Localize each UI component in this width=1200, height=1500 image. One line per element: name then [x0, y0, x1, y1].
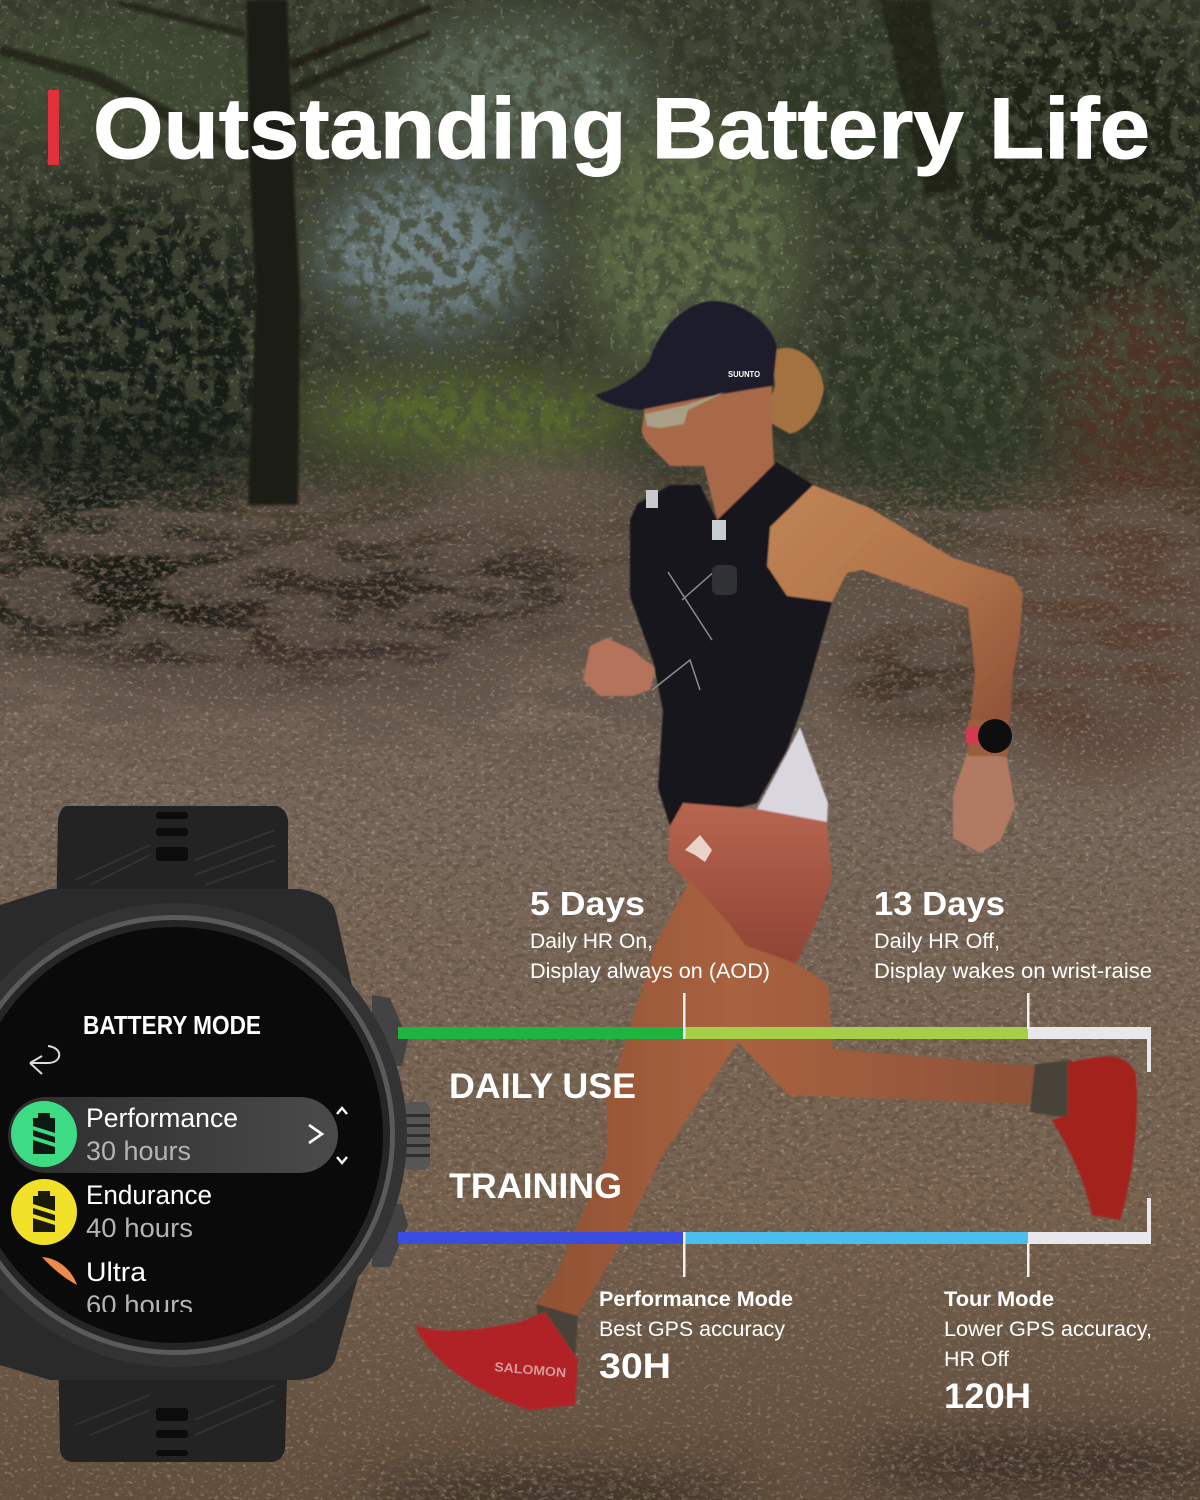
hand	[953, 753, 1015, 853]
screen	[0, 927, 383, 1343]
case lugs	[0, 889, 360, 1380]
watch	[0, 806, 430, 1462]
cap	[595, 301, 777, 410]
training timeline	[398, 1198, 1151, 1277]
title text: Outstanding Battery Life	[93, 81, 1150, 177]
13 days block	[874, 885, 1152, 983]
ultra label: Ultra	[86, 1257, 147, 1287]
runner photo figure	[415, 301, 1137, 1410]
5 days block: Display always on (AOD)	[530, 960, 770, 983]
5 days block: 5 Days	[530, 885, 645, 922]
cap logo: SUUNTO	[728, 369, 760, 379]
performance hours: 30 hours	[86, 1136, 191, 1166]
front fist and forearm	[583, 638, 656, 696]
13 days block: Display wakes on wrist-raise	[874, 960, 1152, 983]
5 days block	[530, 885, 770, 983]
endurance battery icon	[11, 1179, 77, 1245]
cyan segment	[685, 1232, 1028, 1244]
vest bottles and straps	[646, 490, 737, 690]
side buttons	[372, 995, 408, 1267]
training label: TRAINING	[449, 1167, 622, 1206]
head and neck	[642, 380, 774, 522]
performance mode block: 30H	[599, 1347, 671, 1386]
shoe brand: SALOMON	[494, 1359, 567, 1380]
sunglasses	[645, 392, 725, 428]
lime segment	[685, 1027, 1028, 1039]
ultra hours clipped: 60 hours	[86, 1290, 193, 1320]
bottom strap	[58, 1345, 288, 1462]
row chevron	[309, 1125, 322, 1143]
tour mode block: Tour Mode	[944, 1288, 1054, 1311]
daily use timeline	[398, 993, 1151, 1072]
performance mode block: Best GPS accuracy	[599, 1318, 786, 1341]
scroll arrows	[337, 1108, 347, 1163]
tour mode block: HR Off	[944, 1348, 1009, 1371]
performance mode block: Performance Mode	[599, 1288, 793, 1311]
tick tour	[1027, 1243, 1030, 1277]
back arrow icon	[30, 1046, 59, 1074]
crown	[403, 1102, 430, 1170]
tick performance	[683, 1232, 686, 1277]
endurance hours: 40 hours	[86, 1213, 193, 1243]
performance battery icon	[11, 1101, 77, 1167]
wrist	[968, 720, 1008, 756]
blue segment	[398, 1232, 683, 1244]
shorts logo	[685, 835, 712, 862]
screen title: BATTERY MODE	[83, 1010, 261, 1040]
performance label: Performance	[86, 1103, 238, 1133]
13 days block: Daily HR Off,	[874, 930, 1000, 953]
tick 13 days	[1027, 993, 1030, 1029]
bezel	[0, 903, 407, 1367]
tour mode block: 120H	[944, 1377, 1031, 1416]
back arm	[767, 485, 1023, 723]
shoe socks	[536, 1060, 1072, 1360]
red shoe front	[415, 1312, 578, 1410]
white segment	[1028, 1027, 1151, 1072]
legs	[536, 880, 1035, 1318]
accent bar	[48, 90, 59, 165]
performance mode block	[599, 1288, 793, 1386]
ponytail	[765, 348, 824, 434]
shorts	[668, 803, 832, 965]
ultra icon	[42, 1257, 77, 1285]
white segment	[1028, 1198, 1151, 1244]
white singlet hem	[757, 727, 828, 822]
5 days block: Daily HR On,	[530, 930, 653, 953]
black running vest	[630, 462, 832, 826]
tick 5 days	[683, 993, 686, 1039]
tour mode block	[944, 1288, 1152, 1416]
performance row pill	[8, 1097, 338, 1173]
top strap	[56, 806, 288, 930]
daily use label: DAILY USE	[449, 1067, 636, 1106]
watch on wrist	[966, 719, 1012, 753]
tree trunks and branches	[0, 0, 960, 505]
green segment	[398, 1027, 683, 1039]
13 days block: 13 Days	[874, 885, 1005, 922]
endurance label: Endurance	[86, 1180, 212, 1210]
red shoe back	[1052, 1056, 1137, 1220]
tour mode block: Lower GPS accuracy,	[944, 1318, 1152, 1341]
title	[48, 81, 1150, 177]
